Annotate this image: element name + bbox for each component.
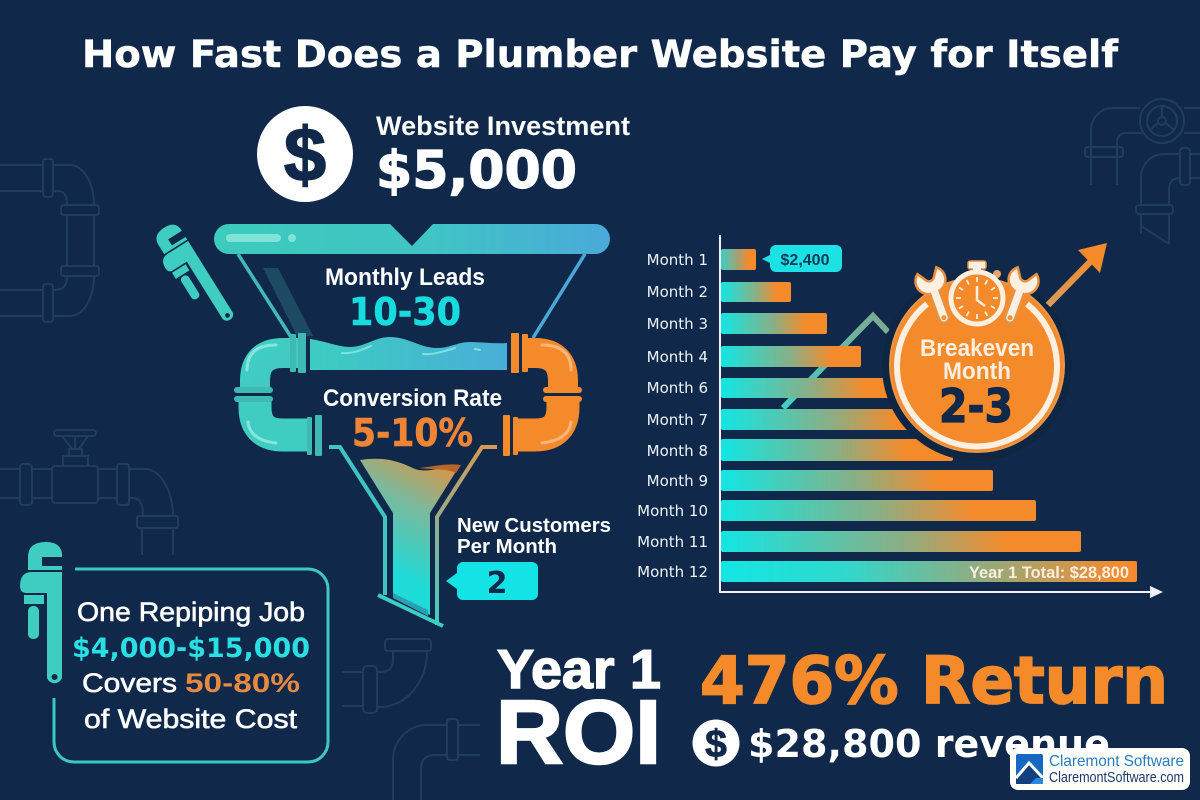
new customers label: New Customers <box>457 515 611 537</box>
rising trend line behind bars <box>783 316 888 408</box>
bar chart <box>637 235 1163 598</box>
badge halo <box>882 271 1072 461</box>
arrow: growth <box>1048 243 1107 305</box>
funnel left wall <box>238 254 291 337</box>
breakeven badge <box>882 261 1072 461</box>
month labels: Month 1 <box>647 251 708 269</box>
bars <box>721 249 1137 582</box>
axes <box>720 235 1155 592</box>
year total label: Year 1 Total: $28,800 <box>969 563 1129 582</box>
icon: wrench on callout <box>20 542 62 683</box>
funnel rim <box>214 224 610 254</box>
month labels: Month 7 <box>647 411 708 429</box>
callout text: of Website Cost <box>84 704 298 734</box>
spout left wall <box>329 447 385 595</box>
conversion rate value: 5-10% <box>352 411 473 455</box>
month labels <box>637 251 708 581</box>
repiping callout <box>54 569 328 762</box>
month labels: Month 3 <box>647 315 708 333</box>
callout text: $4,000-$15,000 <box>72 633 310 664</box>
icon: dollar coin <box>257 106 353 202</box>
funnel right wall <box>533 254 585 338</box>
ROI heading: ROI <box>496 683 661 783</box>
month labels: Month 11 <box>637 533 708 551</box>
rim highlight <box>226 234 296 242</box>
icon: small dollar coin: $ <box>705 723 727 766</box>
badge disc <box>890 278 1064 452</box>
return figure: 476% Return <box>700 644 1168 719</box>
monthly leads value: 10-30 <box>349 290 461 334</box>
year 1 heading: Year 1 <box>497 638 661 700</box>
spout base <box>378 595 443 626</box>
month labels: Month 12 <box>637 563 708 581</box>
month labels: Month 6 <box>647 379 708 397</box>
background pipes: lower centre <box>342 639 480 800</box>
investment amount: $5,000 <box>376 141 577 201</box>
icon: stopwatch <box>951 261 1003 324</box>
callout text: Covers <box>82 668 177 698</box>
new customers label <box>457 515 611 558</box>
spout liquid <box>360 459 460 615</box>
icon: left wrench <box>913 266 960 328</box>
month labels: Month 8 <box>647 442 708 460</box>
pipe: water section <box>310 337 507 370</box>
month labels: Month 10 <box>637 502 708 520</box>
month labels: Month 9 <box>647 472 708 490</box>
website investment label: Website Investment <box>376 111 630 141</box>
pipe: orange right elbow <box>503 333 582 456</box>
new customers label: Per Month <box>457 536 557 558</box>
icon: wrench near funnel <box>147 221 235 334</box>
logo text: Claremont Software <box>1049 753 1184 770</box>
icon: dollar coin: $ <box>284 113 326 198</box>
funnel side shade <box>263 268 313 336</box>
icon: right wrench <box>994 266 1041 328</box>
revenue figure: $28,800 revenue <box>748 722 1110 766</box>
breakeven label: Breakeven <box>920 335 1034 362</box>
new customers badge: 2 <box>487 566 507 601</box>
background pipes: valve <box>0 430 178 555</box>
spout right wall <box>437 447 497 625</box>
logo text <box>1049 753 1184 786</box>
callout border <box>54 569 328 762</box>
conversion rate label: Conversion Rate <box>323 385 502 412</box>
month labels: Month 2 <box>647 283 708 301</box>
background pipes: upper left <box>0 159 99 322</box>
breakeven label: Month <box>943 358 1011 385</box>
logo mark <box>1016 754 1043 784</box>
title: How Fast Does a Plumber Website Pay for Itself <box>82 33 1119 76</box>
background pipes: upper right with wheel <box>1085 99 1200 244</box>
pipe: teal left elbow <box>234 333 322 456</box>
breakeven value: 2-3 <box>939 379 1013 433</box>
month 1 value tag: $2,400 <box>781 252 830 269</box>
callout text: One Repiping Job <box>77 597 305 627</box>
new customers badge <box>446 562 538 601</box>
month labels: Month 4 <box>647 348 708 366</box>
funnel top section <box>214 224 610 338</box>
callout text <box>72 597 310 734</box>
callout text: 50-80% <box>185 668 300 698</box>
funnel spout <box>329 447 497 626</box>
icon: small dollar coin <box>692 720 740 766</box>
badge ring <box>897 304 1057 446</box>
watermark logo <box>1010 748 1190 790</box>
monthly leads label: Monthly Leads <box>325 264 485 291</box>
month 1 value tag <box>762 245 842 272</box>
breakeven label <box>920 335 1034 385</box>
